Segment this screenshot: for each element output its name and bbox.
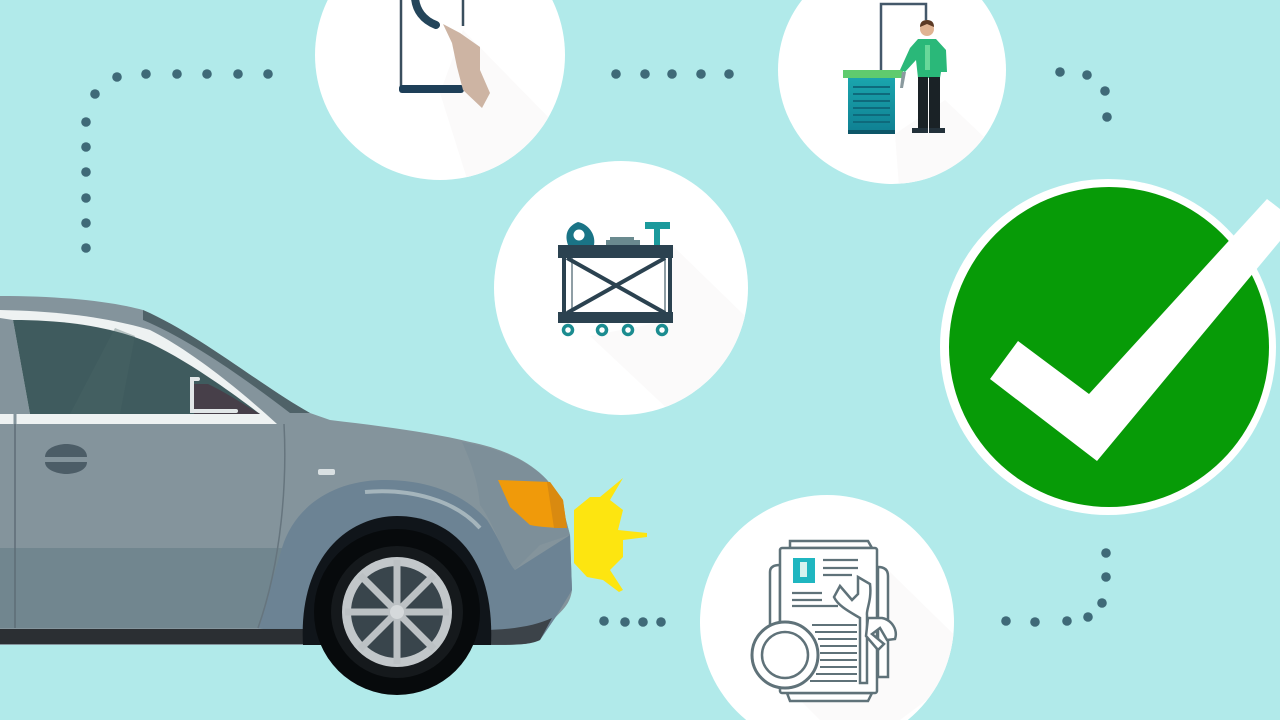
door handle — [45, 444, 87, 474]
icon: report with tyre and wrench — [752, 541, 896, 701]
icon: yellow headlight burst — [574, 478, 647, 592]
roof band — [143, 310, 310, 413]
side window — [13, 320, 260, 414]
panel: service report step — [700, 495, 980, 720]
panel: technician step — [778, 0, 1006, 184]
wheel arch shade — [258, 480, 572, 640]
sill — [0, 629, 330, 644]
wheel — [303, 516, 491, 695]
icon: workbench — [558, 222, 673, 334]
rear pillar — [0, 318, 30, 414]
panel: workbench step — [494, 161, 748, 415]
car body — [0, 296, 572, 645]
door mirror — [194, 384, 260, 414]
door seams — [14, 413, 16, 424]
panel: phone call step — [315, 0, 565, 180]
wheel arch highlight — [365, 491, 480, 528]
lower body shade — [0, 548, 300, 628]
illustration: grey car front — [0, 296, 572, 695]
window frame — [0, 310, 277, 424]
headlight — [498, 480, 567, 528]
icon: phone with hand — [399, 0, 490, 108]
icon: mechanic with toolbox — [843, 4, 947, 134]
hood side panel near headlight — [462, 442, 570, 570]
icon: green check badge — [940, 179, 1280, 515]
